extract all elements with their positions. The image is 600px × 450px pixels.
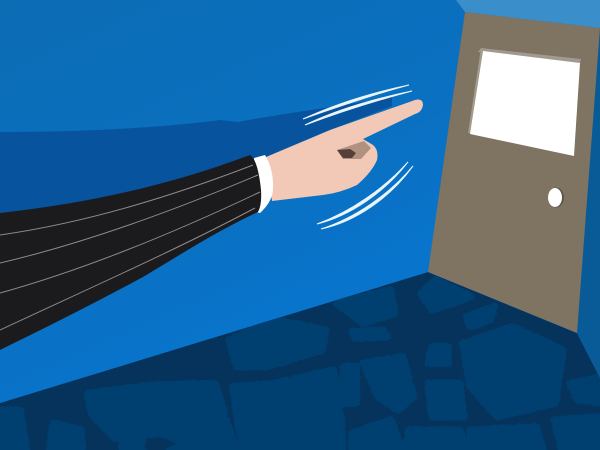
right wall — [577, 28, 600, 378]
motion lines above finger — [303, 85, 412, 125]
hand — [266, 100, 423, 201]
thumbnail shadow — [337, 149, 356, 158]
shirt cuff — [254, 155, 273, 213]
hand and pointing finger — [266, 100, 423, 201]
door — [428, 12, 600, 333]
ceiling — [456, 0, 600, 28]
floor texture patches — [0, 280, 600, 450]
pinstripes — [0, 165, 260, 330]
door knob — [548, 188, 564, 208]
floor — [0, 272, 600, 450]
motion lines below finger — [317, 162, 413, 229]
door window — [468, 48, 581, 156]
arm motion shadow — [0, 97, 392, 260]
jacket sleeve — [0, 155, 261, 350]
thumb — [337, 141, 371, 159]
